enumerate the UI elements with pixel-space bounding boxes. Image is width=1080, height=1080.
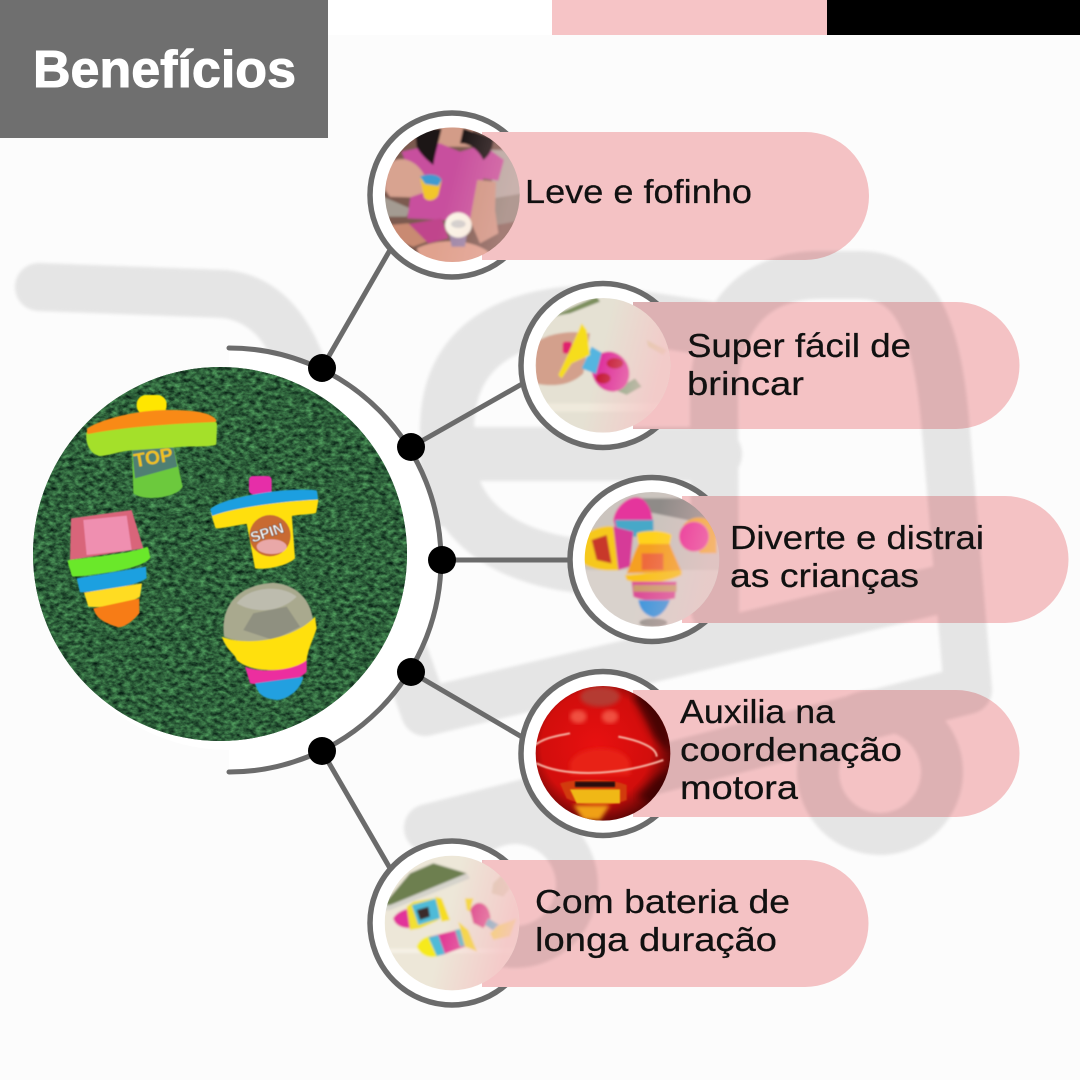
pill: Super fácil de brincar backing xyxy=(633,302,1020,429)
top 3: blue and yellow xyxy=(211,476,317,569)
ring 3 outline xyxy=(567,474,708,644)
ring 4 outline xyxy=(518,668,659,838)
top colour bars xyxy=(328,0,1080,35)
watermark: shopping cart logo xyxy=(39,275,968,947)
top 2: pink cup xyxy=(69,510,149,627)
connector dots xyxy=(308,354,456,765)
central disc and arc xyxy=(39,348,441,772)
text: Com bateria de longa duração xyxy=(535,883,790,958)
text: Auxilia na coordenação motora: coordenação xyxy=(680,731,902,768)
text: Diverte e distrai as crianças: Diverte e distrai xyxy=(730,519,984,556)
text: Super fácil de brincar: Super fácil de xyxy=(687,327,911,364)
top 1: green and orange xyxy=(88,395,215,498)
photo 3: group of tops xyxy=(583,490,720,630)
ring 5 outline xyxy=(367,838,509,1008)
photo 5: three tops on table xyxy=(383,853,523,993)
text: Com bateria de longa duração: longa duração xyxy=(535,921,777,958)
top 1: green and orange: TOP xyxy=(132,445,175,472)
text: Super fácil de brincar xyxy=(687,327,911,402)
text: Com bateria de longa duração: Com bateria de xyxy=(535,883,790,920)
ring 2 outline xyxy=(518,280,659,450)
pill: Com bateria backing xyxy=(482,860,868,987)
main photo: spinning tops on grass xyxy=(30,364,410,744)
text: Auxilia na coordenação motora: Auxilia na xyxy=(680,693,836,730)
ring 1 outline xyxy=(367,110,509,280)
pill: Leve e fofinho backing xyxy=(482,132,869,260)
text: Super fácil de brincar: brincar xyxy=(687,365,804,402)
photo 1: child playing with top xyxy=(383,125,523,265)
pill: Auxilia na coordenação backing xyxy=(633,690,1020,817)
heading: Benefícios: Benefícios xyxy=(33,41,296,99)
text: Leve e fofinho: Leve e fofinho xyxy=(525,173,752,210)
text: Auxilia na coordenação motora: motora xyxy=(680,769,799,806)
heading: Benefícios xyxy=(0,0,328,138)
top 3: blue and yellow: SPIN xyxy=(249,521,286,546)
photo 4: glowing red top xyxy=(533,683,673,823)
text: Diverte e distrai as crianças: as crianças xyxy=(730,557,919,594)
connector lines xyxy=(322,250,570,870)
text: Auxilia na coordenação motora xyxy=(680,693,902,806)
text: Diverte e distrai as crianças xyxy=(730,519,984,594)
pill: Diverte e distrai backing xyxy=(682,496,1068,623)
top 4: clear dome xyxy=(222,583,317,700)
photo 2: hand with top xyxy=(533,297,673,433)
